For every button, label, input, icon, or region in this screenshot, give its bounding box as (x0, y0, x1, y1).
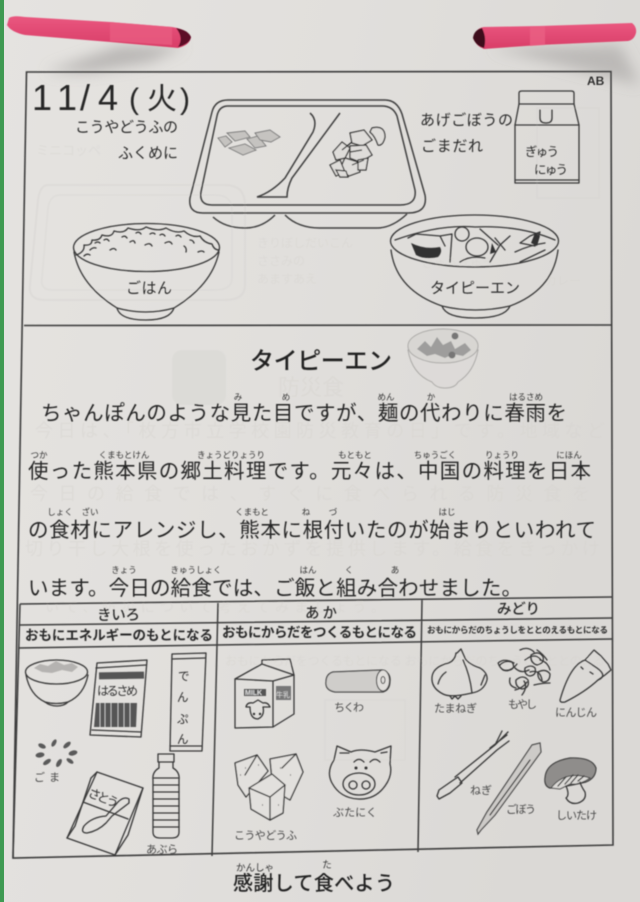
closing message with furigana: かんしゃ (236, 863, 274, 874)
icon: starch package: で (178, 671, 190, 683)
show-through from the sheet beneath: ささみの (257, 254, 305, 268)
icon: taipien bowl (390, 215, 558, 318)
label: sesame: ごま (34, 770, 60, 784)
column heading: green group: みどり (497, 601, 540, 618)
closing message with furigana: た (322, 860, 332, 871)
label: pork: ぶたにく (333, 806, 377, 819)
label: oil: あぶら (146, 843, 178, 856)
icon: sugar bag: さとう (86, 786, 121, 811)
article body text with furigana: はじ (438, 507, 456, 517)
right pink clip (473, 23, 636, 49)
icon: small bowl printed beside title (408, 329, 478, 388)
show-through from the sheet beneath: カレー (545, 274, 581, 288)
date heading: 11/4 (32, 77, 118, 118)
label: onion: たまねぎ (434, 701, 477, 715)
show-through from the sheet beneath: ぎゅうきゅう (422, 256, 494, 270)
show-through from the sheet beneath: いて、防災について考えてみましょう。 (45, 599, 385, 615)
article body text with furigana: め (282, 392, 290, 402)
icon: carrot (560, 650, 611, 702)
icon: rice bowl (74, 224, 220, 320)
label: chikuwa: ちくわ (334, 701, 364, 714)
icon: rice (26, 660, 88, 706)
article body text with furigana: か (427, 392, 436, 402)
article body text with furigana: にほん (556, 450, 582, 460)
article body text with furigana: きょう (111, 565, 137, 575)
section divider (24, 324, 612, 326)
icon: harusame bag: はるさめ (97, 684, 138, 698)
show-through from the sheet beneath: 今日の給食では、すぐに食べられる防災食を (30, 484, 590, 504)
icon: onion (432, 649, 487, 699)
article body text with furigana: はん (299, 565, 317, 575)
column heading: green group (427, 601, 608, 635)
dish label: koyadofu (75, 119, 178, 162)
article body text with furigana: の食材にアレンジし、熊本に根付いたのが始まりといわれて (28, 519, 596, 542)
article body text with furigana: 使った熊本県の郷土料理です。元々は、中国の料理を日本 (28, 460, 591, 483)
food: koyadofu pieces (218, 130, 280, 155)
label: shiitake: しいたけ (556, 809, 597, 822)
dish label: gobo: ごまだれ (421, 138, 483, 155)
icon: sugar bag (67, 772, 143, 855)
show-through from the sheet beneath: 切り干し大根を使ったおかずを提供します。給食をきっかけ (25, 539, 600, 559)
show-through from the sheet beneath: あますあえ (257, 272, 317, 286)
article body text with furigana: きょうどりょうり (197, 450, 265, 460)
icon: oil bottle (153, 754, 179, 838)
icon: sesame seeds (35, 739, 78, 768)
article body text with furigana: み (234, 392, 243, 402)
article body text with furigana: ね (302, 507, 311, 517)
icon: starch package (170, 653, 206, 751)
icon: milk pack: 牛乳 (276, 690, 290, 699)
article body text with furigana (28, 392, 596, 600)
article body text with furigana: くまもとけん (99, 450, 150, 460)
icon: divided tray (190, 100, 425, 228)
icon: koyadofu cubes (235, 754, 303, 820)
label: bean sprouts: もやし (508, 698, 537, 711)
carton text (525, 145, 568, 177)
carton text: にゅう (534, 163, 568, 177)
icon: starch package: ぷ (177, 713, 189, 726)
article body text with furigana: います。今日の給食では、ご飯と組み合わせました。 (28, 577, 522, 600)
icon: starch package: ん (177, 691, 188, 704)
carton text: ぎゅう (525, 145, 559, 159)
icon: pig face (329, 746, 391, 799)
show-through from the sheet beneath: ミニコッペ (36, 143, 101, 158)
label: carrot: にんじん (555, 706, 597, 719)
dish label: gobo: あげごぼうの (420, 112, 513, 129)
icon: bean sprouts (498, 648, 550, 695)
column heading: yellow group: きいろ (97, 607, 140, 624)
article body text with furigana: はるさめ (509, 392, 543, 402)
closing message with furigana (233, 860, 395, 895)
date heading: (火) (129, 83, 190, 116)
article body text with furigana: つか (30, 450, 48, 460)
article body text with furigana: めん (377, 392, 395, 402)
label: burdock: ごぼう (506, 802, 536, 816)
column heading: red group: おもにからだをつくるもとになる (222, 625, 417, 640)
label: green onion: ねぎ (470, 783, 492, 797)
dish label: koyadofu: こうやどうふの (75, 119, 178, 136)
article body text with furigana: く (345, 565, 353, 575)
article body text with furigana: しょく (47, 507, 73, 517)
icon: shiitake (545, 758, 596, 803)
label: koyadofu: こうやどうふ (234, 829, 297, 842)
icon: chikuwa (326, 670, 390, 692)
binder clip shadows (45, 46, 185, 72)
show-through from the sheet beneath: 今日は、「枚方市立学校園防災教育の日」です。地域など (35, 421, 605, 441)
left pink clip (7, 16, 191, 48)
article body text with furigana: きゅうしょく (170, 565, 222, 575)
date heading (32, 77, 190, 118)
column heading: yellow group (25, 607, 213, 643)
article body text with furigana: もともと (338, 450, 372, 460)
article body text with furigana: あ (391, 565, 399, 575)
icon: milk pack (235, 659, 294, 728)
column heading: yellow group: おもにエネルギーのもとになる (25, 628, 213, 643)
article body text with furigana: くまもと (235, 507, 269, 517)
article body text with furigana: ちゅうごく (414, 450, 456, 460)
AB mark: AB (587, 74, 605, 88)
icon: burdock (477, 743, 541, 834)
show-through from the sheet beneath: きりぼしだいこん (257, 236, 353, 250)
article title: タイピーエン (250, 348, 392, 375)
closing message with furigana: 感謝して食べよう (233, 871, 395, 895)
bowl label: タイピーエン (430, 280, 520, 297)
column heading: green group: おもにからだのちょうしをととのえるもとになる (427, 625, 608, 635)
icon: milk carton (515, 91, 579, 183)
green edge of backing sheet (0, 0, 4, 902)
icon: green onion (437, 731, 509, 799)
show-through from the sheet beneath: おもにからだをつくるもとになる おもにからだのちょうしをととのえる (225, 654, 605, 668)
icon: harusame bag (90, 660, 147, 737)
column heading: red group: あか (305, 605, 338, 622)
dish label: koyadofu: ふくめに (118, 145, 178, 162)
icon: milk pack: MILK (245, 690, 262, 697)
column heading: red group (222, 605, 417, 640)
bowl label: ごはん (126, 280, 172, 297)
food: fried burdock (330, 127, 385, 177)
show-through from the sheet beneath: 防災食 (278, 375, 344, 400)
food groups table lines (13, 597, 612, 858)
icon: starch package: ん (177, 733, 188, 746)
article body text with furigana: ざい (81, 507, 99, 517)
article body text with furigana: ちゃんぽんのような見た目ですが、麺の代わりに春雨を (41, 402, 567, 425)
show-through from the sheet beneath (25, 108, 605, 760)
dish label: gobo (420, 112, 513, 155)
article body text with furigana: りょうり (485, 450, 519, 460)
article body text with furigana: づ (329, 507, 338, 517)
